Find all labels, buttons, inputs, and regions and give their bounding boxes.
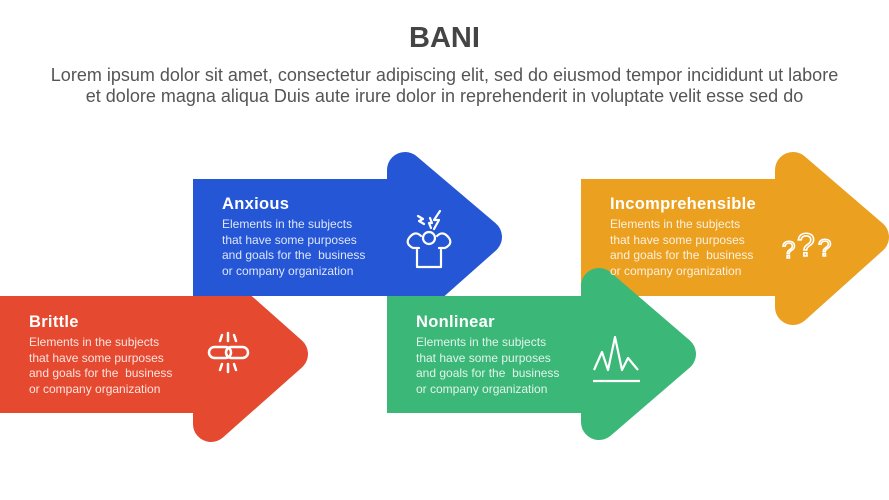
text: and goals for the business <box>416 366 559 380</box>
text: anxious <box>222 195 365 278</box>
text: incomprehensible <box>610 195 756 278</box>
text: or company organization <box>29 382 160 396</box>
text: Nonlinear <box>416 313 495 331</box>
text: and goals for the business <box>29 366 172 380</box>
subtitle: et dolore magna aliqua Duis aute irure dolor in reprehenderit in voluptate velit esse sed do <box>86 86 803 106</box>
icon: nonlinear chart <box>593 337 640 381</box>
subtitle <box>51 65 838 106</box>
text: that have some purposes <box>222 232 357 246</box>
text: that have some purposes <box>416 350 551 364</box>
icon: broken chain <box>209 333 248 372</box>
text: or company organization <box>610 264 741 278</box>
text: Incomprehensible <box>610 195 756 213</box>
text: Anxious <box>222 195 289 213</box>
icon: anxious person <box>408 211 450 267</box>
text: that have some purposes <box>29 350 164 364</box>
arrow: brittle <box>0 284 290 424</box>
text: Elements in the subjects <box>416 335 546 349</box>
text: or company organization <box>416 382 547 396</box>
arrow: anxious <box>193 170 484 307</box>
text: Elements in the subjects <box>610 217 740 231</box>
text: nonlinear <box>416 313 559 396</box>
text: and goals for the business <box>610 248 753 262</box>
arrow: nonlinear <box>387 286 678 422</box>
text: brittle <box>29 313 172 396</box>
icon: question marks: ? <box>818 235 831 262</box>
subtitle: Lorem ipsum dolor sit amet, consectetur adipiscing elit, sed do eiusmod tempor incididunt ut labore <box>51 65 838 85</box>
icon: question marks <box>782 227 831 264</box>
arrow: incomprehensible <box>581 170 871 307</box>
text: Elements in the subjects <box>222 217 352 231</box>
text: that have some purposes <box>610 232 745 246</box>
text: or company organization <box>222 264 353 278</box>
text: Brittle <box>29 313 79 331</box>
icon: question marks: ? <box>797 227 815 263</box>
title: BANI <box>409 22 480 54</box>
icon: question marks: ? <box>782 237 795 264</box>
text: and goals for the business <box>222 248 365 262</box>
text: Elements in the subjects <box>29 335 159 349</box>
